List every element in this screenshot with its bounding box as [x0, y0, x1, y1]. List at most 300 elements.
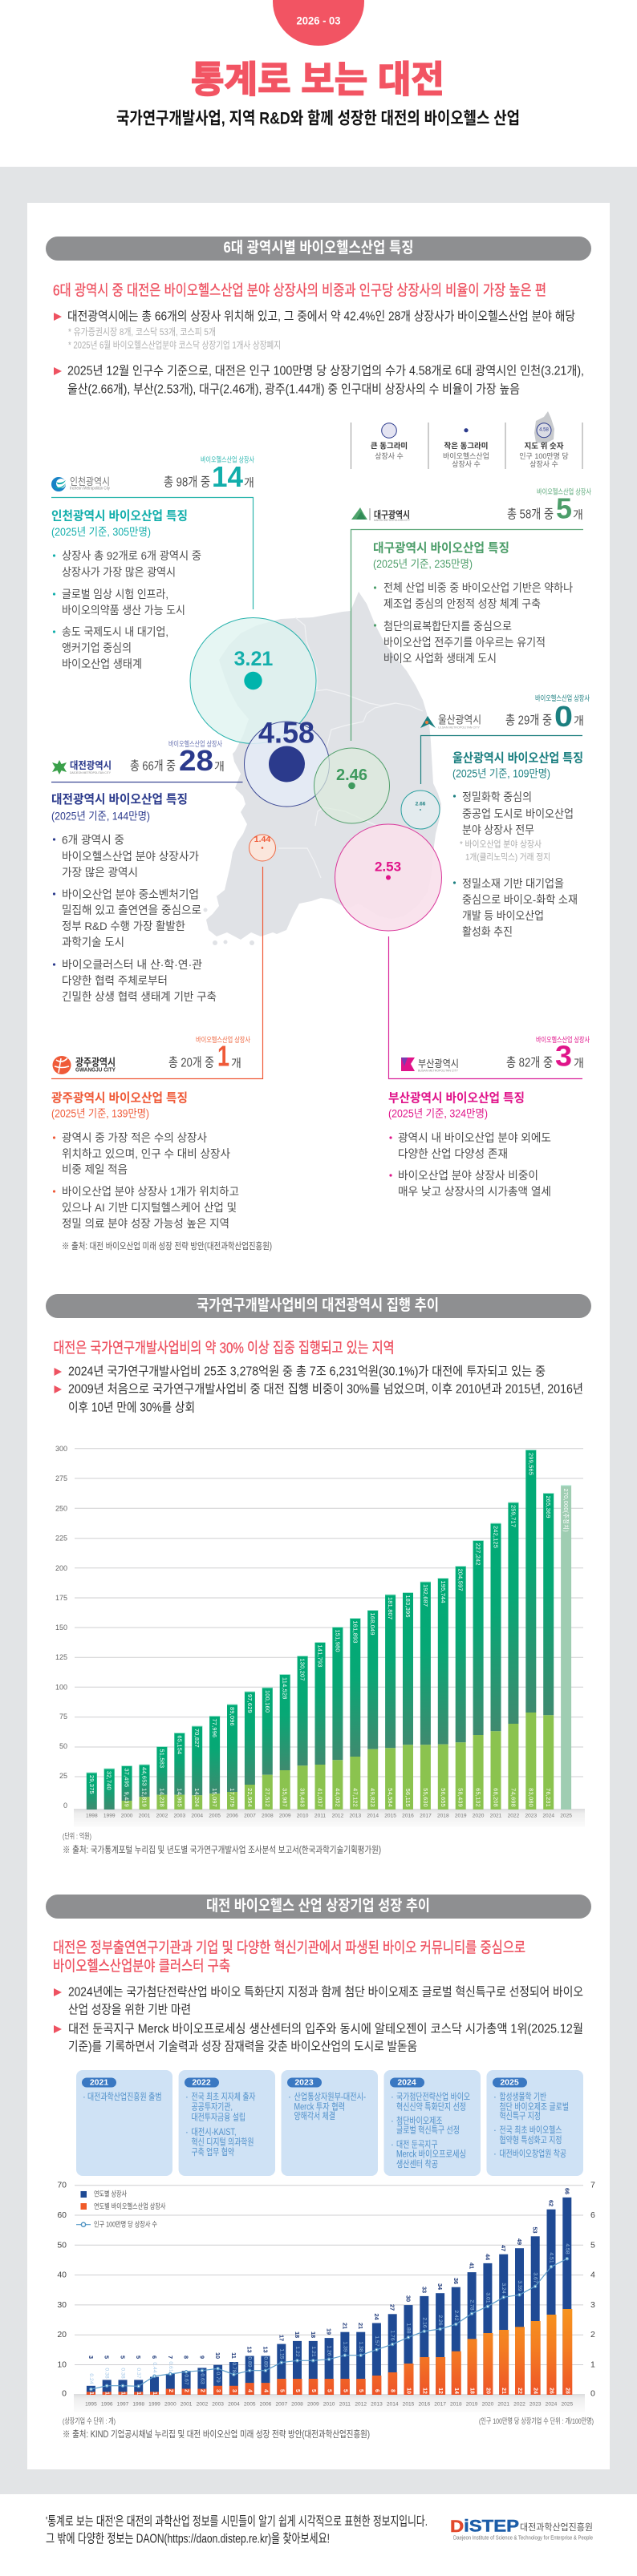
chart 2 biohealth labels: 28 [564, 2388, 570, 2394]
chart 1 gridlines and axis: 150 [55, 1624, 67, 1632]
count: Gwangju: 개 [231, 1057, 241, 1070]
chart 2 per-capita labels: 2.26 [437, 2315, 443, 2326]
chart 2 per-capita labels: 3.39 [517, 2280, 522, 2291]
chart 2 gridlines and axes: 2 [590, 2330, 595, 2339]
chart 2 biohealth labels: 1 [120, 2392, 125, 2395]
chart 2 total labels: 62 [547, 2200, 555, 2206]
legend: map number: 4.58 [539, 428, 549, 433]
bullets: section 3: 대전 둔곡지구 Merck 바이오프로세싱 생산센터의 입주와 동시에 알테오젠이 코스닥 시가총액 1위(2025.12월 [68, 2022, 583, 2036]
chart 2 per-capita labels: 1.26 [327, 2345, 332, 2356]
chart 1 total value labels: 259,717 [509, 1505, 517, 1527]
card 2024: 대전 둔곡지구 [396, 2140, 438, 2150]
bullets: Daegu: 바이오 사업화 생태계 도시 [383, 652, 497, 665]
combo chart: listed companies [57, 2181, 595, 2412]
chart 1 total value labels: 227,242 [475, 1543, 482, 1566]
bubble: Gwangju 1.44 [249, 835, 276, 861]
chart 1 total value labels: 37,495 [124, 1769, 131, 1787]
chart 1 total value labels: 242,125 [493, 1526, 499, 1548]
chart 2 per-capita line [90, 2258, 568, 2391]
chart 2 year labels: 2023 [529, 2402, 542, 2407]
bullets: Ulsan: 분야 상장사 전무 [462, 823, 534, 836]
chart 2 total labels: 11 [230, 2352, 237, 2359]
chart 2 biohealth labels: 2 [199, 2389, 205, 2392]
panel: Daejeon [51, 740, 242, 1003]
chart 1 year labels: 2023 [525, 1814, 537, 1818]
count: Ulsan: 총 29개 중 [505, 714, 552, 728]
chart 2 year labels: 2004 [228, 2402, 240, 2407]
chart 2 navy bars [87, 2198, 571, 2395]
heading: Ulsan: (2025년 기준, 109만명) [452, 768, 550, 779]
chart 2 total labels: 66 [563, 2188, 570, 2194]
chart 1 total value labels: 265,369 [545, 1496, 552, 1519]
bullets: section 1: 울산(2.66개), 부산(2.53개), 대구(2.46개), 광주(1.44개) 중 인구대비 상장사의 수 비율이 가장 높음 [67, 382, 520, 396]
chart 1 gridlines and axis: 125 [55, 1653, 67, 1661]
bullets: Incheon [53, 549, 201, 670]
logo: Daejeon [52, 760, 112, 774]
chart 2 gridlines and axes [57, 2181, 595, 2412]
chart 2 biohealth labels: 5 [278, 2389, 284, 2392]
chart 2 year labels: 2022 [513, 2402, 525, 2407]
key message 3: 대전은 정부출연연구기관과 기업 및 다양한 혁신기관에서 파생된 바이오 커뮤니티를 중심으로 [53, 1939, 525, 1956]
chart 2 biohealth labels: 6 [374, 2389, 379, 2392]
card 2024: 글로벌 혁신특구 선정 [396, 2125, 460, 2136]
bullets: Ulsan: 정밀화학 중심의 [462, 791, 532, 803]
chart 2 year labels: 2012 [355, 2402, 367, 2407]
chart 1 year labels: 2007 [244, 1814, 256, 1818]
heading: Daegu: 대구광역시 바이오산업 특징 [373, 540, 509, 555]
chart 1 total value labels: 204,597 [457, 1568, 465, 1591]
chart 1 total value labels: 183,395 [404, 1595, 412, 1618]
count: Incheon: 개 [244, 476, 254, 489]
bullets: section 1: * 2025년 6월 바이오헬스산업분야 코스닥 상장기업 1개사 상장폐지 [68, 340, 281, 351]
chart 2 year labels: 1995 [85, 2402, 97, 2407]
chart 2 gridlines and axes: 7 [590, 2181, 595, 2190]
legend: map number: 상장사 수 [529, 460, 558, 468]
chart 1 regional value labels: 14,238 [158, 1788, 165, 1807]
chart 2 total labels: 5 [103, 2356, 111, 2359]
card 2023: Merck 투자 협력 [294, 2102, 345, 2112]
count: Daegu: 5 [556, 492, 572, 524]
chart 2 year labels: 1998 [132, 2402, 144, 2407]
bullets: Daejeon: 다양한 협력 주체로부터 [62, 974, 168, 987]
panel: Daegu [351, 487, 592, 741]
card 2021: 대전과학산업진흥원 출범 [87, 2091, 162, 2102]
logo: DISTEP: DiSTEP [450, 2517, 519, 2535]
chart 2 total labels: 34 [436, 2283, 444, 2291]
chart 2 biohealth labels: 5 [342, 2389, 347, 2392]
chart 2 biohealth labels: 3 [215, 2389, 221, 2392]
chart 1 total value labels: 44,653 [141, 1767, 148, 1786]
bullets: Ulsan: 중공업 도시로 바이오산업 [462, 807, 574, 820]
chart 1 regional value labels: 68,208 [493, 1788, 499, 1807]
bubble: Daejeon 4.58: 4.58 [258, 717, 314, 749]
bullets: Daejeon: 긴밀한 상생 협력 생태계 기반 구축 [62, 990, 217, 1003]
chart 2 total labels: 10 [214, 2352, 221, 2359]
card 2022: 혁신 디지털 의과학원 [191, 2136, 254, 2147]
chart 2 per-capita labels: 4.51 [549, 2252, 554, 2263]
bullets: Daegu: 제조업 중심의 안정적 성장 체계 구축 [383, 597, 541, 610]
chart 2 total labels: 27 [389, 2304, 396, 2311]
chart 1 total value labels: 65,154 [176, 1735, 183, 1754]
chart 2 year labels: 2019 [466, 2402, 478, 2407]
card 2022 [179, 2070, 275, 2176]
card 2023: 산업통상자원부-대전시- [294, 2091, 366, 2102]
bubble: Ulsan 2.66 [401, 791, 440, 829]
count: Daejeon: 28 [179, 744, 213, 777]
section heading: R&D [46, 1294, 591, 1318]
bubble: Daegu 2.46 [314, 748, 390, 823]
chart 2 total labels: 21 [341, 2323, 348, 2329]
bullets: Ulsan [453, 791, 578, 938]
logo: Incheon: 인천광역시 [70, 475, 110, 487]
chart 1 gridlines and axis: 175 [55, 1594, 67, 1602]
count: Busan: 총 82개 중 [506, 1055, 553, 1070]
key message 3: 바이오헬스산업분야 클러스터 구축 [53, 1958, 230, 1974]
chart 2 total labels: 53 [532, 2226, 539, 2234]
bullets: section 2: 2024년 국가연구개발사업비 25조 3,278억원 중 총 7조 6,231억원(30.1%)가 대전에 투자되고 있는 중 [68, 1365, 546, 1379]
logo: Daegu [351, 508, 410, 522]
chart 2 per-capita labels: 0.67 [184, 2374, 189, 2385]
chart 2 year labels: 1996 [101, 2402, 113, 2407]
chart 2 legend: 연도별 상장사 [94, 2190, 128, 2198]
chart 1 regional value labels: 65,132 [475, 1788, 482, 1807]
bullets: section 3: 산업 성장을 위한 기반 마련 [68, 2003, 191, 2017]
bubble: Ulsan 2.66: 2.66 [416, 802, 426, 807]
logo: Gwangju: GWANGJU CITY [75, 1068, 116, 1073]
key message 1: 6대 광역시 중 대전은 바이오헬스산업 분야 상장사의 비중과 인구당 상장사의 비율이 가장 높은 편 [53, 282, 546, 298]
chart 1 gridlines and axis: 275 [55, 1474, 67, 1482]
chart 2 year labels: 2013 [371, 2402, 383, 2407]
chart 2 year labels: 2025 [561, 2402, 573, 2407]
count: Gwangju [168, 1036, 251, 1073]
chart 2 total labels: 13 [262, 2346, 270, 2353]
bullets: Daejeon: 바이오클러스터 내 산·학·연·관 [62, 958, 202, 971]
chart 1 total value labels: 130,207 [299, 1658, 306, 1681]
heading: Daejeon [51, 792, 188, 823]
bullets: Busan: 매우 낮고 상장사의 시가총액 열세 [398, 1185, 551, 1198]
chart 1 year labels: 2005 [209, 1814, 221, 1818]
chart 2 per-capita labels: 0.78 [231, 2362, 237, 2373]
card 2023 [281, 2070, 378, 2176]
legend: small circle: 작은 동그라미 [444, 443, 489, 451]
legend: large circle: 상장사 수 [375, 452, 404, 460]
card 2025: 합성생물학 기반 [499, 2092, 546, 2102]
bubble: Incheon 3.21: 3.21 [234, 648, 273, 670]
card 2025: 2025 [500, 2078, 519, 2088]
heading: Daejeon: (2025년 기준, 144만명) [51, 810, 150, 823]
bullets: Daegu: 바이오산업 전주기를 아우르는 유기적 [383, 636, 546, 649]
bullets: Gwangju: 비중 제일 적음 [62, 1163, 128, 1175]
section heading: 6대 광역시: 6대 광역시별 바이오헬스산업 특징 [223, 239, 414, 257]
bullets: Ulsan: 정밀소재 기반 대기업을 [462, 877, 564, 890]
count: Daegu: 바이오헬스산업 상장사 [537, 487, 592, 495]
chart 2 total labels [87, 2188, 570, 2359]
heading: Busan [388, 1090, 525, 1119]
chart 2 total labels: 17 [278, 2335, 285, 2341]
chart 2 per-capita labels: 0.61 [168, 2361, 173, 2372]
chart 2 biohealth labels: 21 [501, 2388, 506, 2394]
chart 2 legend: 연도별 바이오헬스산업 상장사 [94, 2202, 166, 2210]
card 2024: 혁신신약 특화단지 선정 [396, 2101, 466, 2112]
chart 2 biohealth labels: 20 [485, 2388, 490, 2394]
bubble: Busan 2.53: 2.53 [375, 859, 401, 874]
chart 2 year labels: 2016 [418, 2402, 430, 2407]
chart 2 biohealth labels: 5 [358, 2389, 363, 2392]
chart 2 year labels: 2010 [323, 2402, 335, 2407]
footer note [46, 2514, 428, 2546]
card 2025: · [493, 2126, 497, 2136]
timeline cards [76, 2070, 583, 2176]
heading: Incheon: (2025년 기준, 305만명) [51, 526, 151, 538]
bullets: Incheon: 송도 국제도시 내 대기업, [62, 625, 168, 638]
chart 2 units and source: (상장기업 수 단위 : 개) [63, 2416, 116, 2426]
bubble: Busan 2.53 [335, 824, 441, 931]
chart 2 biohealth labels: 10 [406, 2388, 411, 2394]
chart 2 year labels: 2020 [482, 2402, 494, 2407]
count: Gwangju: 1 [217, 1039, 229, 1073]
chart 2 total labels: 5 [135, 2356, 142, 2359]
chart 2 units and source [63, 2416, 594, 2440]
chart 1 gridlines and axis: 250 [55, 1504, 67, 1512]
bullets: Busan: 바이오산업 분야 상장사 비중이 [398, 1169, 538, 1182]
chart 2 per-capita labels: 3.67 [533, 2272, 538, 2283]
logo: DISTEP [450, 2517, 593, 2542]
chart 2 per-capita labels: 1.15 [278, 2348, 284, 2360]
panel: Ulsan [420, 694, 590, 938]
bullets: Incheon: 바이오산업 생태계 [62, 657, 142, 670]
chart 1 regional value labels: 41,037 [316, 1788, 324, 1807]
logo: Ulsan: ULSAN METROPOLITAN CITY [438, 725, 480, 730]
chart 2 per-capita labels: 0.24 [88, 2373, 94, 2384]
heading: Gwangju: (2025년 기준, 139만명) [51, 1108, 149, 1119]
card 2025: 대전바이오창업원 착공 [499, 2148, 566, 2159]
chart 2 year labels: 2018 [450, 2402, 462, 2407]
bullets: Daegu: 첨단의료복합단지를 중심으로 [383, 620, 512, 633]
legend: small circle: 바이오헬스산업 [443, 452, 489, 460]
bullets: Gwangju: 정밀 의료 분야 성장 가능성 높은 지역 [62, 1217, 229, 1230]
panel: Incheon [51, 455, 255, 670]
chart 2 biohealth labels: 14 [453, 2388, 459, 2394]
chart 2 total labels: 30 [404, 2295, 412, 2302]
chart 2 year labels: 2015 [403, 2402, 415, 2407]
chart 2 gridlines and axes: 30 [57, 2300, 67, 2310]
card 2024: · [391, 2141, 394, 2150]
logo: DISTEP: 대전과학산업진흥원 [520, 2521, 593, 2533]
count: Daejeon: 총 66개 중 [130, 758, 176, 773]
chart 1 regional value labels: 74,698 [509, 1788, 517, 1807]
bullets: section 2: 2009년 처음으로 국가연구개발사업비 중 대전 집행 비중이 30%를 넘었으며, 이후 2010년과 2015년, 2016년 [68, 1382, 583, 1397]
bullets: Daejeon: 6개 광역시 중 [62, 834, 124, 847]
chart 1 total value labels: 151,980 [334, 1629, 341, 1652]
chart 1 regional value labels: 58,439 [457, 1788, 465, 1807]
bullets: Ulsan: * 바이오산업 분야 상장사 [460, 839, 542, 850]
count: Ulsan: 바이오헬스산업 상장사 [535, 694, 590, 702]
logo: Gwangju [53, 1056, 116, 1074]
chart 2 per-capita labels: 1.21 [310, 2346, 316, 2357]
legend: small circle [443, 428, 489, 468]
bullets: Daejeon: 밀집해 있고 출연연을 중심으로 [62, 904, 201, 916]
chart 2 total labels: 24 [373, 2313, 380, 2320]
panel: Gwangju [51, 867, 263, 1230]
heading: Incheon: 인천광역시 바이오산업 특징 [51, 508, 188, 523]
chart 1 year labels: 2019 [455, 1814, 467, 1818]
chart 1 total value labels: 299,565 [527, 1453, 534, 1475]
card 2025: 협약형 특성화고 지정 [499, 2134, 562, 2145]
bullets: Incheon: 상장사 총 92개로 6개 광역시 중 [62, 549, 201, 562]
heading: Daegu [373, 540, 509, 570]
count: Gwangju: 바이오헬스산업 상장사 [196, 1036, 251, 1044]
chart 1 gridlines and axis: 100 [55, 1684, 67, 1692]
count: Daegu: 개 [573, 508, 583, 521]
chart 1 year labels: 2022 [508, 1814, 520, 1818]
heading: Gwangju: 광주광역시 바이오산업 특징 [51, 1090, 188, 1105]
bullets: Ulsan: 1개(클리노믹스) 거래 정지 [465, 851, 550, 863]
chart 2 total labels: 36 [452, 2278, 460, 2284]
chart 1 year labels: 2008 [262, 1814, 274, 1818]
chart 1 regional value labels: 9,439 [124, 1791, 131, 1807]
chart 1 total value labels: 100,160 [264, 1690, 271, 1713]
chart 2 biohealth labels: 1 [136, 2392, 141, 2395]
heading: Busan: 부산광역시 바이오산업 특징 [388, 1090, 525, 1105]
card 2021: · [83, 2093, 86, 2102]
chart 1 total value labels: 51,583 [158, 1749, 165, 1768]
chart 1 regional value labels: 27,512 [264, 1788, 271, 1807]
legend: map number: 인구 100만명 당 [519, 452, 569, 460]
count: Daegu: 총 58개 중 [507, 507, 554, 521]
chart 1 total value labels: 141,793 [316, 1645, 324, 1668]
bullets: Daegu [374, 581, 573, 665]
chart 1 year labels: 2024 [542, 1814, 554, 1818]
bullets: section 3 [54, 1985, 583, 2054]
count: Daegu [507, 487, 592, 524]
chart 1 regional value labels: 55,630 [422, 1788, 429, 1807]
legend: large circle: 큰 동그라미 [371, 443, 408, 451]
chart 2 per-capita labels: 3.01 [485, 2292, 490, 2303]
chart 1 dark green bars [87, 1450, 554, 1810]
heading: Busan: (2025년 기준, 324만명) [388, 1108, 488, 1119]
chart 1 regional value labels: 56,115 [404, 1789, 412, 1807]
bubble: Daegu 2.46: 2.46 [336, 766, 367, 784]
bullets: Busan: 다양한 산업 다양성 존재 [398, 1147, 508, 1160]
chart 1 regional value labels: 14,965 [176, 1788, 183, 1807]
bullets: Gwangju: 광역시 중 가장 적은 수의 상장사 [62, 1131, 207, 1144]
chart 1 regional value labels: 54,584 [387, 1788, 394, 1807]
card 2025: · [493, 2093, 497, 2102]
bullets: Incheon: 앵커기업 중심의 [62, 641, 132, 654]
logo: Ulsan: 울산광역시 [438, 714, 481, 726]
chart 2 biohealth labels: 4 [247, 2389, 253, 2392]
chart 2 per-capita labels: 0.37 [136, 2368, 141, 2379]
count: Incheon: 총 98개 중 [164, 475, 210, 489]
chart 2 year labels: 2021 [497, 2402, 509, 2407]
chart 2 per-capita labels: 1.76 [390, 2330, 396, 2341]
section heading: R&D: 국가연구개발사업비의 대전광역시 집행 추이 [197, 1296, 439, 1314]
bullets: Daejeon: 과학기술 도시 [62, 936, 124, 948]
logo: DISTEP: Daejeon Institute of Science & Technology for Enterprise & People [453, 2535, 593, 2542]
bullets: section 1: 2025년 12월 인구수 기준으로, 대전은 인구 100만명 당 상장기업의 수가 4.58개로 6대 광역시인 인천(3.21개), [67, 364, 584, 378]
chart 1 gridlines and axis: 200 [55, 1564, 67, 1572]
chart 2 units and source: (인구 100만명 당 상장기업 수 단위 : 개/100만명) [479, 2416, 594, 2426]
chart 2 total labels: 49 [516, 2238, 523, 2245]
chart 1 gridlines and axis: 0 [63, 1802, 67, 1810]
heading: Ulsan: 울산광역시 바이오산업 특징 [452, 750, 583, 765]
chart 1 regional value labels: 76,231 [545, 1788, 552, 1807]
chart 1 year labels: 1998 [86, 1814, 98, 1818]
chart 1 regional value labels [124, 1788, 552, 1807]
chart 2 year labels: 2011 [339, 2402, 351, 2407]
chart 1 total value labels [88, 1453, 570, 1794]
chart 1 total value labels: 161,893 [351, 1621, 359, 1644]
footer note: 그 밖에 다양한 정보는 DAON(https://daon.distep.re.kr)을 찾아보세요! [46, 2532, 330, 2546]
chart 2 year labels: 2001 [181, 2402, 193, 2407]
chart 2 per-capita labels: 0.38 [120, 2368, 125, 2379]
count: Ulsan: 개 [574, 714, 584, 727]
card 2024: Merck 바이오프로세싱 [396, 2149, 466, 2160]
chart 2 per-capita labels: 0.63 [199, 2373, 205, 2384]
card 2022: 구축 업무 협약 [191, 2146, 234, 2157]
card 2025: 전국 최초 바이오헬스 [499, 2125, 562, 2136]
logo: Daejeon: DAEJEON METROPOLITAN CITY [70, 770, 111, 774]
card 2022: · [185, 2128, 189, 2137]
card 2022: 대전시-KAIST, [191, 2127, 236, 2137]
logo: Busan: 부산광역시 [418, 1058, 459, 1070]
count: Daejeon [130, 740, 225, 777]
card 2024: · [391, 2093, 394, 2102]
chart 1 regional value labels: 83,080 [527, 1788, 534, 1807]
chart 1 total value labels: 114,528 [282, 1677, 289, 1700]
section heading: listed companies: 대전 바이오헬스 산업 상장기업 성장 추이 [206, 1897, 430, 1915]
chart 1 regional value labels: 39,463 [299, 1788, 306, 1807]
logo: Daegu: 대구광역시 [374, 509, 410, 520]
chart 2 total labels: 47 [500, 2245, 507, 2251]
chart 2 per-capita labels: 0.89 [247, 2356, 253, 2368]
bullets: section 2: 이후 10년 만에 30%를 상회 [68, 1400, 195, 1414]
chart 2 year labels: 2014 [387, 2402, 399, 2407]
issue badge [273, 0, 364, 46]
chart 1 year labels: 2015 [384, 1814, 396, 1818]
chart 2 per-capita labels: 2.16 [421, 2317, 427, 2328]
chart 2 total labels: 13 [246, 2346, 254, 2353]
chart 2 year labels: 2006 [260, 2402, 272, 2407]
chart 1 regional value labels: 17,079 [229, 1788, 236, 1807]
chart 2 year labels: 2024 [546, 2402, 558, 2407]
card 2024: 첨단바이오제조 [396, 2116, 443, 2126]
chart 2 gridlines and axes: 5 [590, 2240, 595, 2250]
heading: Daejeon: 대전광역시 바이오산업 특징 [51, 792, 188, 807]
chart 2 gridlines and axes: 3 [590, 2300, 595, 2310]
chart 2 total labels: 6 [151, 2356, 158, 2359]
legend: large circle [371, 423, 408, 460]
count: Busan: 3 [555, 1039, 572, 1073]
logo: Daegu: DAEGU METROPOLITAN CITY [374, 518, 410, 522]
bubble: Incheon 3.21 [190, 617, 316, 744]
chart 1 total value labels: 192,687 [422, 1584, 429, 1607]
issue badge: 2026 - 03 [297, 14, 341, 27]
card 2024: 2024 [397, 2078, 416, 2088]
chart 2 per-capita labels: 2.78 [469, 2299, 475, 2311]
chart 1 gridlines and axis: 300 [55, 1445, 67, 1453]
heading: Gwangju [51, 1090, 188, 1119]
chart 1 unit and source [63, 1831, 381, 1855]
chart 2 total labels: 44 [484, 2254, 491, 2261]
chart 2 total labels: 9 [198, 2356, 205, 2359]
bullets: Daejeon: 정부 R&D 수행 가장 활발한 [62, 920, 185, 932]
chart 2 total labels: 18 [294, 2331, 301, 2338]
bar chart: national R&D spend in Daejeon [55, 1445, 585, 1827]
card 2022: 2022 [192, 2078, 211, 2088]
chart 2 biohealth labels [88, 2388, 570, 2395]
count: Incheon [164, 455, 255, 493]
